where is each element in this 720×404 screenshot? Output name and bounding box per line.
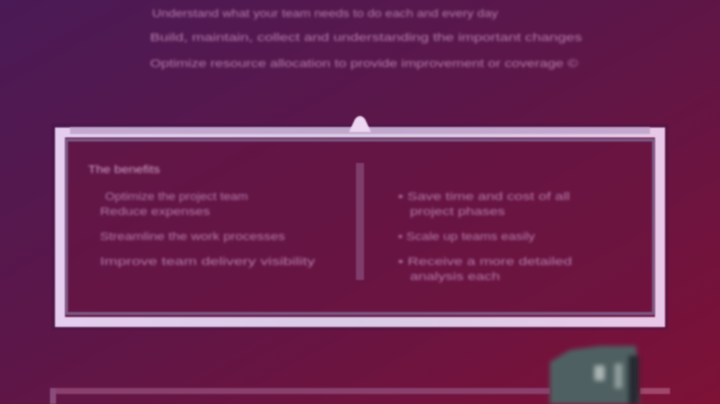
right item 3 continued: analysis each bbox=[410, 271, 500, 283]
left item 1: Optimize the project team bbox=[105, 191, 248, 203]
bottom box left edge bbox=[50, 388, 56, 404]
right item 1 continued: project phases bbox=[410, 206, 506, 218]
intro text block bbox=[150, 8, 583, 70]
right item 2: • Scale up teams easily bbox=[398, 231, 536, 243]
bottom box top edge left bbox=[50, 388, 550, 394]
left item 3: Improve team delivery visibility bbox=[100, 256, 316, 268]
icon: device bbox=[550, 346, 640, 404]
heading: benefits: The benefits bbox=[88, 164, 161, 176]
right item 1: • Save time and cost of all bbox=[398, 191, 570, 203]
frame dark halo bbox=[53, 126, 667, 328]
intro line 3: Optimize resource allocation to provide improvement or coverage © bbox=[150, 58, 578, 70]
frame top band shade bbox=[70, 127, 650, 134]
frame border bbox=[60, 132, 660, 322]
intro line 1: Understand what your team needs to do each and every day bbox=[152, 8, 499, 20]
panel: benefits frame bbox=[53, 116, 667, 328]
column divider bbox=[356, 163, 364, 280]
left item 2: Streamline the work processes bbox=[100, 231, 286, 243]
device highlight right bbox=[615, 364, 622, 388]
right item 3: • Receive a more detailed bbox=[398, 256, 572, 268]
bottom box top edge right bbox=[640, 388, 670, 394]
intro line 2: Build, maintain, collect and understanding the important changes bbox=[150, 32, 583, 44]
panel: right column bbox=[398, 191, 572, 283]
left item 1 continued: Reduce expenses bbox=[100, 206, 211, 218]
device body bbox=[550, 346, 640, 404]
device dark side bbox=[628, 355, 639, 404]
panel: bottom box outline bbox=[50, 388, 670, 404]
frame inner shadow bbox=[66, 140, 654, 314]
device highlight left bbox=[595, 366, 604, 380]
frame inner fill bbox=[65, 137, 655, 317]
panel: left column bbox=[88, 164, 316, 268]
icon: frame pointer bbox=[349, 116, 371, 132]
